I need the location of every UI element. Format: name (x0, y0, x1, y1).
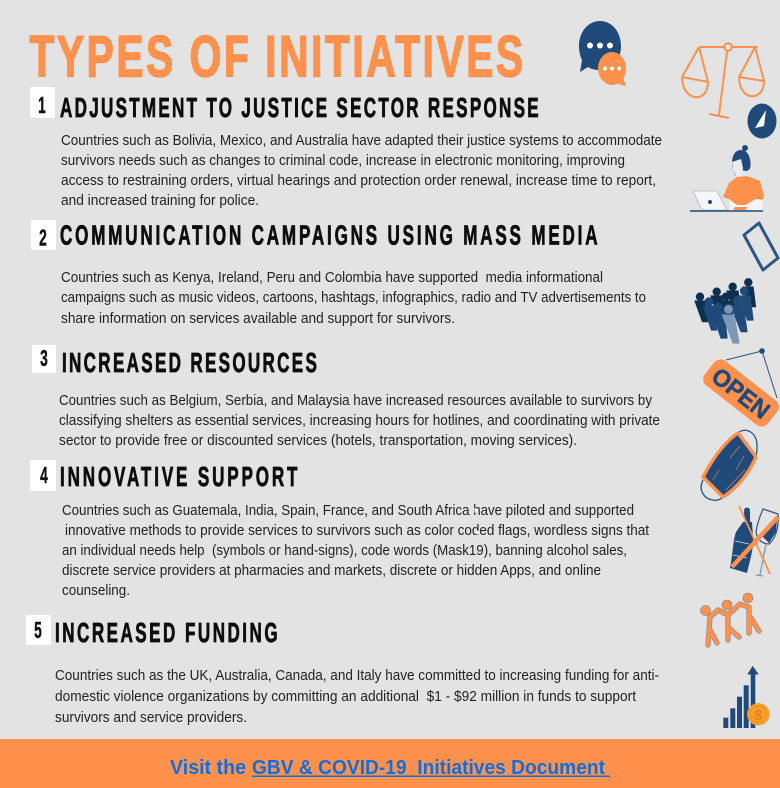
banner call to action: GBV & COVID-19_Initiatives Document (252, 757, 605, 779)
icon: compass (748, 104, 776, 138)
icon: crossed-out alcohol (730, 506, 778, 576)
body text 3: sector to provide free or discounted services (hotels, transportation, moving services). (59, 432, 577, 449)
body text 5 (55, 667, 659, 726)
icon: open sign (700, 348, 780, 430)
body text 4 (62, 502, 650, 599)
heading 1: ADJUSTMENT TO JUSTICE SECTOR RESPONSE (60, 92, 539, 123)
body text 4: innovative methods to provide services to survivors such as color coded flags, wordless signs that (65, 522, 650, 539)
body text 1: Countries such as Bolivia, Mexico, and Australia have adapted their justice systems to accommodate (61, 132, 662, 149)
section 5: increased funding (26, 615, 659, 726)
icon: group of people (695, 279, 756, 343)
number badge 1 (30, 87, 55, 119)
body text 5: Countries such as the UK, Australia, Canada, and Italy have committed to increasing funding for anti- (55, 667, 659, 684)
banner call to action: Visit the (170, 757, 246, 779)
body text 1: access to restraining orders, virtual hearings and protection order renewal, increase time to report, (61, 172, 656, 189)
icon: rising bar chart with coin: $ (754, 707, 763, 724)
body text 5: domestic violence organizations by committing an additional $1 - $92 million in funds to support (55, 688, 637, 705)
body text 2: campaigns such as music videos, cartoons, hashtags, infographics, radio and TV advertisements to (61, 289, 646, 306)
icon: three people supporting each other (700, 593, 759, 645)
title: TYPES OF INITIATIVES (30, 24, 523, 89)
icon: rising bar chart with coin (723, 666, 770, 728)
icon: open sign: OPEN (706, 363, 775, 425)
body text 3: classifying shelters as essential services, increasing hours for hotlines, and coordinating with private (59, 412, 660, 429)
body text 1 (61, 132, 662, 209)
body text 4: counseling. (62, 582, 130, 599)
body text 3 (59, 392, 660, 449)
body text 2: share information on services available and support for survivors. (61, 310, 455, 327)
body text 2: Countries such as Kenya, Ireland, Peru and Colombia have supported media informational (61, 269, 603, 286)
section 3: increased resources (32, 345, 660, 449)
number badge 5 (26, 615, 51, 645)
body text 4: Countries such as Guatemala, India, Spain, France, and South Africa have piloted and supported (62, 502, 634, 519)
icon: face mask (701, 430, 757, 500)
number badge 4: 4 (40, 464, 48, 489)
number badge 3 (32, 345, 56, 373)
body text 4: discrete service providers at pharmacies and markets, discrete or hidden Apps, and online (62, 562, 601, 579)
footer banner (0, 739, 780, 788)
heading 5: INCREASED FUNDING (55, 617, 278, 648)
body text 4: an individual needs help (symbols or hand-signs), code words (Mask19), banning alcohol sales, (62, 542, 627, 559)
icon: scales of justice (682, 43, 764, 118)
heading 3: INCREASED RESOURCES (62, 347, 317, 378)
body text 1: and increased training for police. (61, 192, 259, 209)
number badge 1: 1 (38, 94, 46, 119)
icon: smartphone (744, 223, 778, 270)
number badge 4 (30, 460, 56, 491)
body text 2 (61, 269, 646, 327)
number badge 3: 3 (40, 347, 48, 372)
number badge 2: 2 (39, 226, 47, 252)
body text 3: Countries such as Belgium, Serbia, and Malaysia have increased resources available to survivors by (59, 392, 652, 409)
section 1: justice sector response (30, 87, 662, 209)
heading 2: COMMUNICATION CAMPAIGNS USING MASS MEDIA (60, 219, 598, 251)
section 2: communication campaigns (31, 219, 646, 327)
icon: chat bubbles (579, 21, 626, 86)
body text 5: survivors and service providers. (55, 709, 247, 726)
section 4: innovative support (30, 460, 650, 599)
icon: woman at laptop (690, 145, 764, 211)
number badge 2 (31, 220, 56, 252)
number badge 5: 5 (34, 619, 42, 644)
body text 1: survivors needs such as changes to criminal code, increase in electronic monitoring, improving (61, 152, 625, 169)
heading 4: INNOVATIVE SUPPORT (60, 461, 297, 492)
